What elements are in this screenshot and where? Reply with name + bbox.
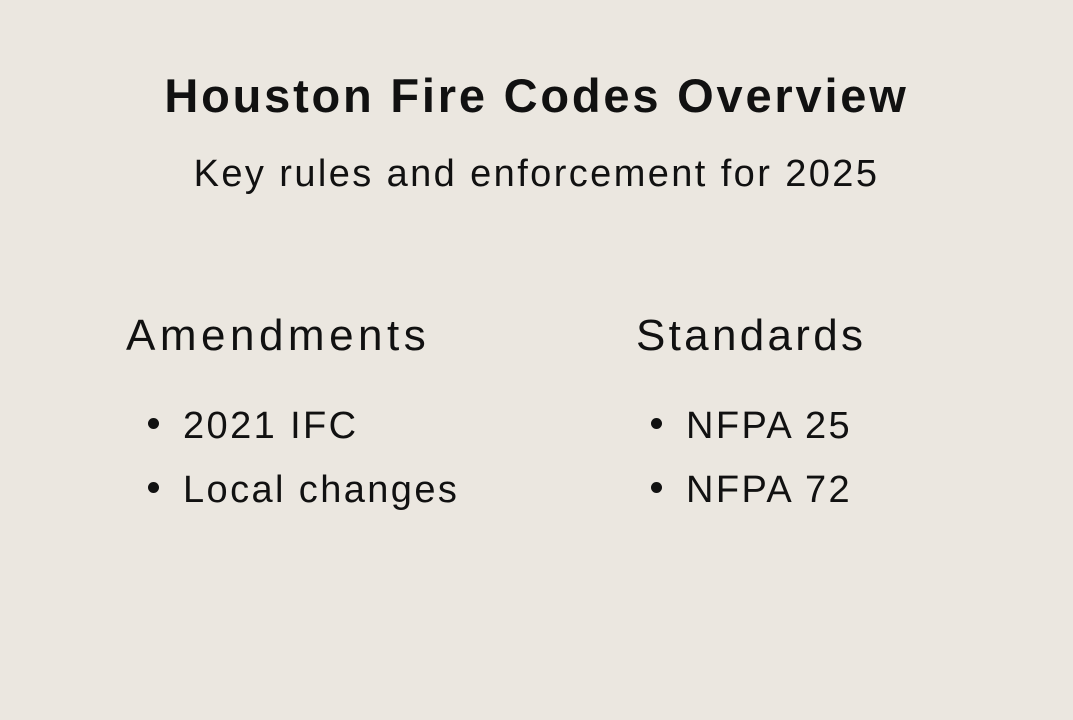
list: standards: NFPA 72 bbox=[686, 469, 852, 511]
panel: amendments bbox=[126, 311, 459, 511]
list: standards: NFPA 25 bbox=[686, 405, 852, 447]
title: Houston Fire Codes Overview bbox=[164, 69, 909, 122]
list: amendments bbox=[148, 405, 459, 511]
list: amendments: 2021 IFC bbox=[183, 405, 359, 447]
heading: amendments: Amendments bbox=[126, 311, 430, 360]
heading: standards: Standards bbox=[636, 311, 866, 360]
subtitle: Key rules and enforcement for 2025 bbox=[194, 153, 879, 195]
panel: standards bbox=[636, 311, 866, 511]
list: amendments: Local changes bbox=[183, 469, 459, 511]
list: standards bbox=[651, 405, 852, 511]
